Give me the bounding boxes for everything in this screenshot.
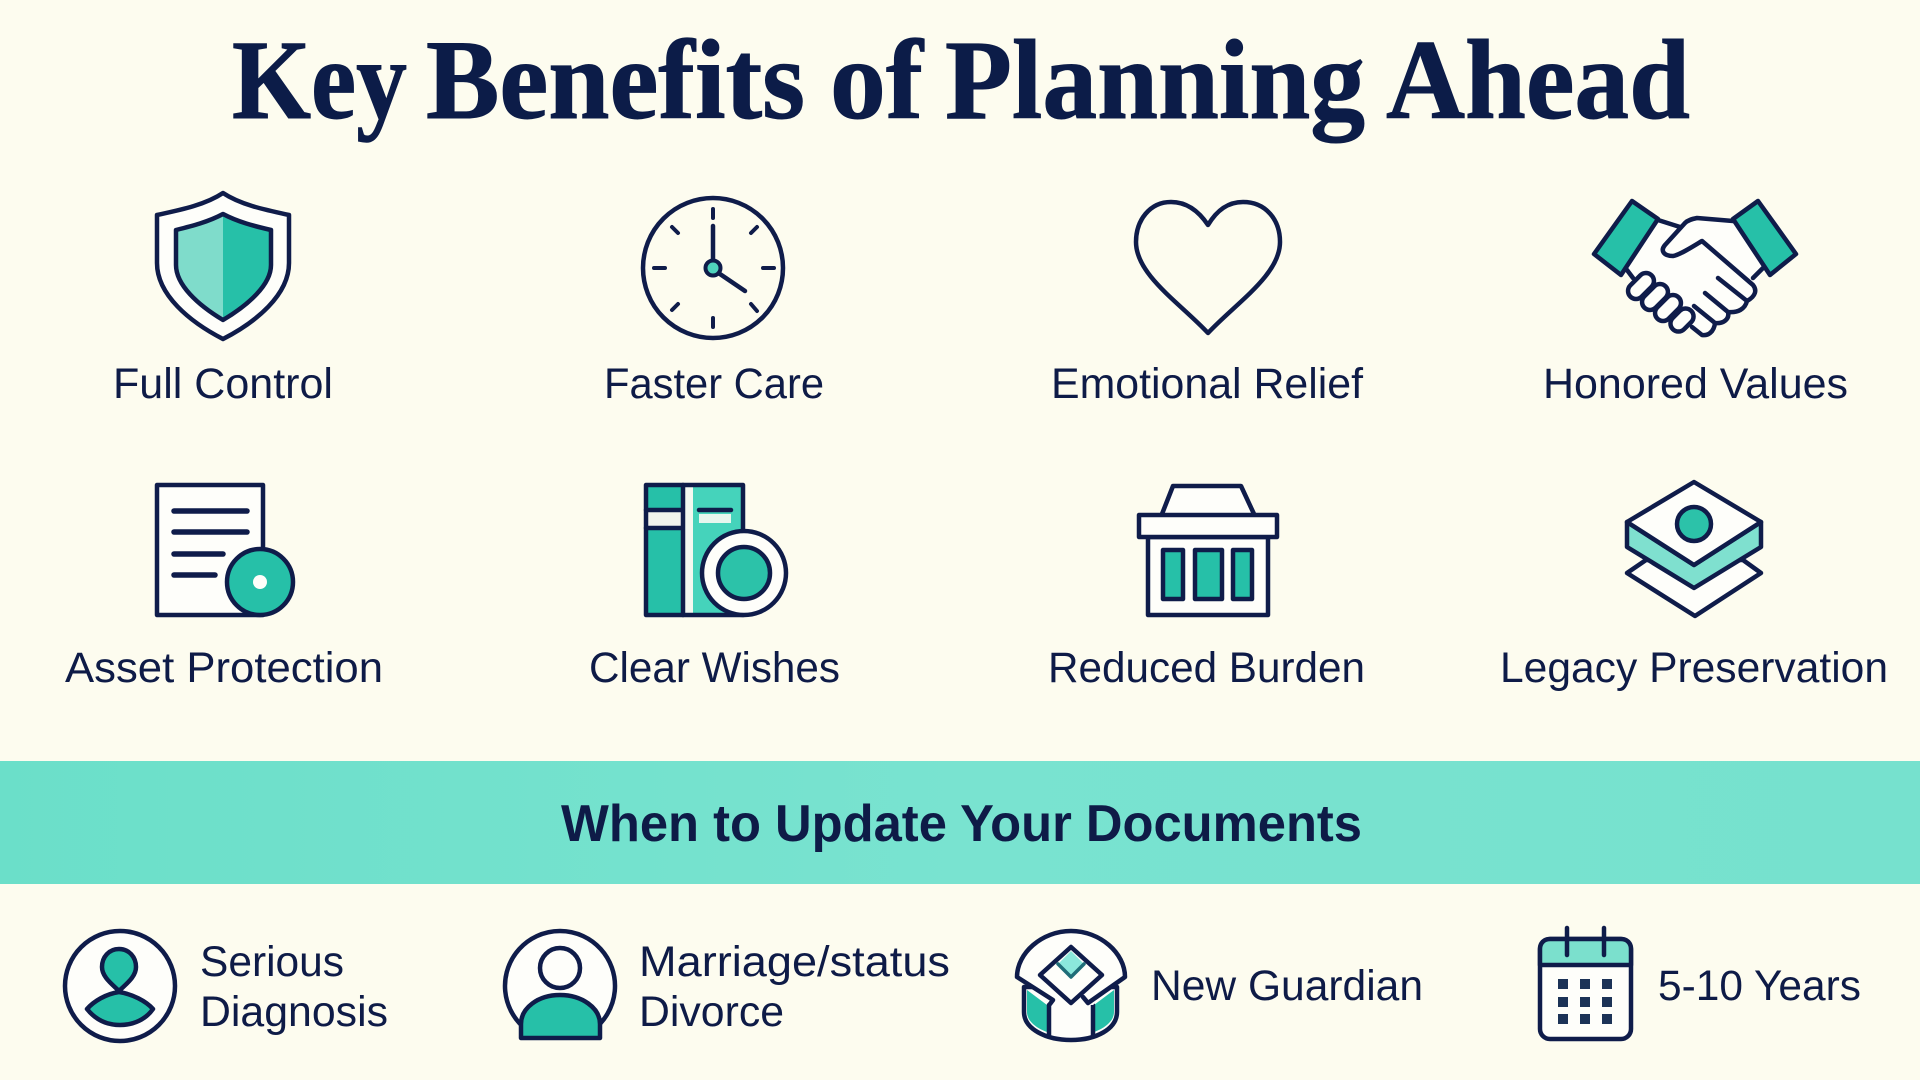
label: Full Control: Full Control <box>113 360 333 408</box>
icon: heart <box>1136 202 1280 333</box>
trigger: New Guardian <box>1017 931 1423 1040</box>
trigger: Marriage/status Divorce: Divorce <box>639 988 784 1036</box>
label: 5-10 Years: 5-10 Years <box>1658 962 1861 1010</box>
label: Legacy Preservation: Legacy Preservation <box>1500 644 1888 692</box>
label: Faster Care: Faster Care <box>604 360 824 408</box>
icon: shield <box>157 193 289 339</box>
label: Emotional Relief: Emotional Relief <box>1051 360 1364 408</box>
band: When to Update Your Documents <box>0 761 1920 884</box>
label: Asset Protection: Asset Protection <box>65 644 383 692</box>
benefit: Reduced Burden <box>1048 486 1365 692</box>
icon: person in circle <box>65 931 175 1041</box>
benefit: Full Control <box>113 193 333 408</box>
icon: clock <box>643 198 783 338</box>
label: Clear Wishes: Clear Wishes <box>589 644 840 692</box>
icon: calendar <box>1540 928 1631 1039</box>
label: New Guardian: New Guardian <box>1151 962 1423 1010</box>
title: of <box>830 18 924 143</box>
benefit: Legacy Preservation <box>1500 482 1888 692</box>
trigger: Serious Diagnosis: Diagnosis <box>200 988 388 1036</box>
title <box>232 18 1690 143</box>
benefit: Asset Protection <box>65 485 383 692</box>
benefit: Faster Care <box>604 198 824 408</box>
trigger: Marriage/status Divorce <box>505 931 950 1038</box>
icon: person bust <box>505 931 615 1038</box>
label: Honored Values: Honored Values <box>1543 360 1848 408</box>
title: Planning <box>945 18 1365 143</box>
trigger: Serious Diagnosis <box>65 931 388 1041</box>
trigger: 5-10 Years <box>1540 928 1861 1039</box>
benefit: Emotional Relief <box>1051 202 1364 408</box>
icon: book with disc <box>646 485 786 615</box>
icon: handshake <box>1594 201 1796 335</box>
band heading: When to Update Your Documents <box>561 795 1362 853</box>
icon: document with seal <box>157 485 293 615</box>
title: Ahead <box>1386 18 1690 143</box>
benefit: Honored Values <box>1543 201 1848 408</box>
label: Serious Diagnosis: Serious <box>200 938 344 986</box>
title: Key <box>232 18 407 143</box>
title: Benefits <box>426 18 805 143</box>
icon: basket <box>1139 486 1277 615</box>
benefit: Clear Wishes <box>589 485 840 692</box>
icon: guardian emblem <box>1017 931 1125 1040</box>
label: Reduced Burden: Reduced Burden <box>1048 644 1365 692</box>
icon: layers <box>1627 482 1761 616</box>
label: Marriage/status Divorce: Marriage/status <box>639 938 950 986</box>
